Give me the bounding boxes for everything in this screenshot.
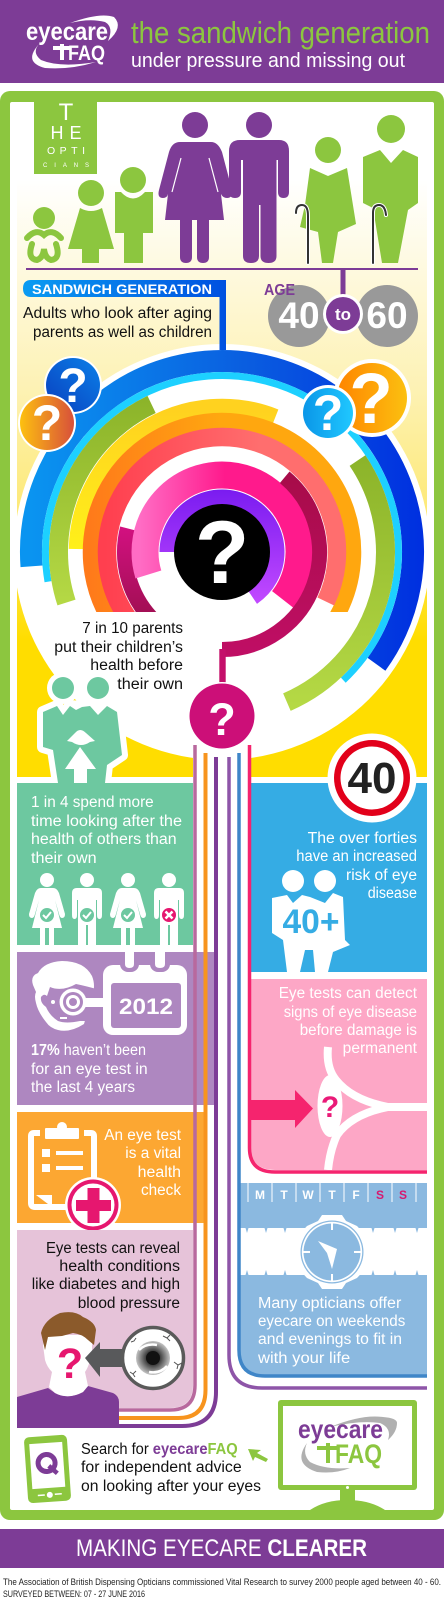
sandwich generation label: Adults who look after aging [23,305,212,322]
monitor with logo [278,1400,417,1510]
panel: over forties: The over forties [308,830,417,847]
question circle: magenta [188,682,256,750]
panel: 1 in 4: 1 in 4 spend more [31,794,154,811]
sandwich generation label: SANDWICH GENERATION [32,281,212,297]
panel: health conditions: blood pressure [78,1295,180,1312]
person with question mark [17,1312,119,1428]
logo block: The Opticians: T [59,99,74,126]
icon: bloodshot eye [122,1328,184,1388]
panel: vital health check: health [138,1164,181,1181]
icon: calendar 2012: 2012 [119,994,173,1019]
logo: eyecare FAQ [298,1414,397,1472]
week day strip: S [399,1188,407,1202]
person with question mark: ? [57,1340,83,1388]
logo block: The Opticians: OPTI [47,145,85,157]
center question circle: ? [195,502,249,602]
age badge: 40 to 60: to [335,305,351,324]
panel: 1 in 4: time looking after the [31,813,182,830]
rainbow rings [31,361,413,702]
text: 7 in 10 parents: put their children’s [54,639,183,656]
arrow: to person [85,1342,125,1377]
header banner [0,0,444,83]
panel: weekends and evenings: and evenings to fit in [258,1331,402,1348]
icon: eye test head [32,961,105,1031]
panel: vital health check [17,1112,204,1233]
age badge: 40 to 60: 40 [278,295,320,336]
sandwich generation label [23,280,226,350]
text: 7 in 10 parents: 7 in 10 parents [82,620,183,637]
panel: 17 percent: the last 4 years [31,1079,135,1096]
logo: eyecare FAQ: FAQ [335,1439,382,1469]
panel: 17 percent [17,952,214,1105]
question circle: small orange [18,394,76,452]
icon: 40 plus couple: 40+ [282,903,340,941]
source note [3,1577,441,1600]
icon: eye with arrow [251,1047,427,1170]
panel: 1 in 4 [17,783,193,945]
question circle: cyan [300,385,356,441]
figure: grandfather [363,115,418,263]
source note: SURVEYED BETWEEN: 07 - 27 JUNE 2016 [3,1589,145,1600]
text: 7 in 10 parents: health before [90,657,183,674]
logo: eyecare FAQ: eyecare [26,18,108,46]
panel: over forties: have an increased [296,848,417,865]
week day strip: T [328,1188,336,1202]
panel: 17 percent: 17% haven’t been [31,1042,146,1059]
subtitle: under pressure and missing out [131,50,405,72]
question circle: big orange [333,359,411,439]
speed sign 40: 40 [348,754,396,803]
panel: detect eye disease: permanent [343,1040,418,1057]
text: search for eyecareFAQ: Search for eyecareFAQ [81,1441,238,1458]
figure: boy [115,167,153,263]
icon: 40 plus couple [272,870,350,972]
panel: health conditions: health conditions [59,1258,180,1275]
panel: weekends and evenings: with your life [257,1350,350,1367]
text: 7 in 10 parents [54,620,183,693]
logo: eyecare FAQ: eyecare [298,1414,383,1444]
figure: mother [158,112,232,263]
question circle: big orange: ? [349,360,393,439]
panel: detect eye disease: before damage is [300,1022,417,1039]
question circle: dark blue: ? [58,360,88,413]
center question circle [174,502,270,602]
panel: vital health check: check [141,1182,181,1199]
question circle: small orange: ? [32,395,62,451]
speed sign 40 [328,734,416,822]
panel: detect eye disease: signs of eye disease [284,1004,417,1021]
panel: health conditions [17,1230,193,1408]
sandwich generation label: parents as well as children [33,324,212,341]
panel: weekends and evenings: eyecare on weekends [258,1313,406,1330]
figure: grandmother [300,137,356,263]
white disc behind rings [14,344,430,760]
white strip behind route lines [193,740,251,790]
yellow background [17,102,427,777]
icon: phone search [24,1435,71,1503]
icon: watch [240,1215,427,1289]
panel: over forties [251,783,427,972]
age badge: 40 to 60: AGE [264,282,295,299]
question circle: cyan: ? [313,385,343,441]
footer banner: MAKING EYECARE CLEARER [76,1535,367,1562]
logo block: The Opticians: HE [50,123,82,143]
question mark stem [219,649,226,694]
week day strip: M [255,1188,265,1202]
logo block: The Opticians [34,99,97,174]
icon: eye with arrow: ? [321,1091,339,1124]
footer banner [0,1529,444,1568]
panel: vital health check: is a vital [125,1145,181,1162]
week day strip: F [352,1188,360,1202]
panel: 1 in 4: health of others than [31,831,177,848]
icon: clipboard [31,1122,94,1207]
age badge: 40 to 60: 60 [366,295,408,336]
text: search for eyecareFAQ: for independent advice [81,1459,242,1476]
panel: over forties: risk of eye [346,867,417,884]
icon: parents with child [43,672,122,783]
panel: weekends and evenings: Many opticians offer [258,1295,401,1312]
logo: eyecare FAQ: FAQ [68,42,105,65]
logo block: The Opticians: CIANS [43,163,89,169]
question circle: dark blue [44,356,102,414]
panel: over forties: disease [368,885,417,902]
panel: weekends and evenings [240,1183,427,1375]
week day strip [248,1183,416,1202]
arrow: green pointer [248,1449,268,1462]
icon: four people with marks [29,873,184,945]
age badge: 40 to 60 [264,270,418,347]
week day strip: S [376,1188,384,1202]
figure: father [229,112,289,263]
text: search for eyecareFAQ: on looking after your eyes [81,1478,261,1495]
panel: detect eye disease: Eye tests can detect [279,985,418,1002]
coloured route lines [17,745,427,1426]
panel: detect eye disease [251,979,427,1170]
panel: vital health check: An eye test [104,1127,182,1144]
panel: health conditions: Eye tests can reveal [46,1240,180,1257]
family figures [27,112,418,263]
icon: calendar 2012 [103,952,187,1035]
panel: 1 in 4: their own [31,850,97,867]
figure: girl [68,180,114,263]
text: search for eyecareFAQ [81,1441,261,1495]
logo: eyecare FAQ [26,15,118,68]
text: 7 in 10 parents: their own [117,676,183,693]
icon: plus in circle [65,1177,121,1233]
week day strip: W [302,1188,314,1202]
icon: walking canes [296,205,386,263]
week day strip: T [280,1188,288,1202]
panel: 17 percent: for an eye test in [31,1061,148,1078]
question circle: magenta: ? [208,694,236,745]
panel: health conditions: like diabetes and high [32,1276,180,1293]
figure: baby [27,207,61,260]
